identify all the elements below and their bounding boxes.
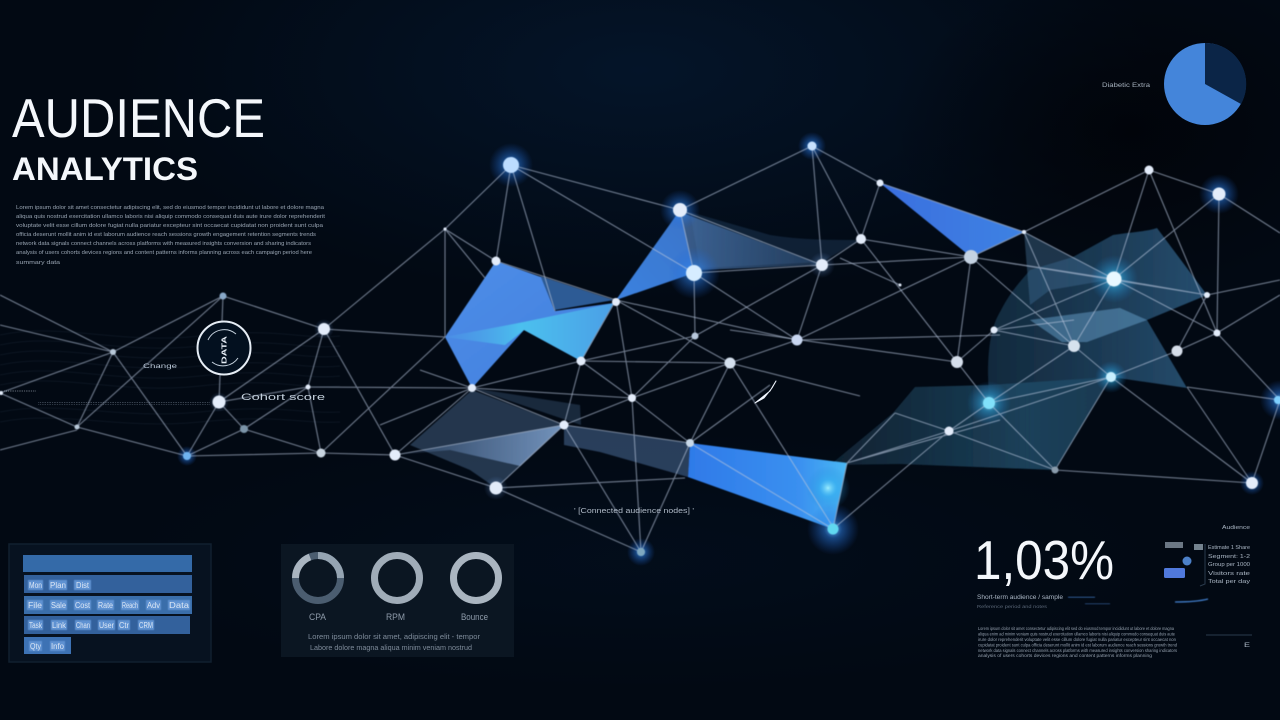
donut 2 <box>374 556 420 600</box>
translucent and blue network facets <box>395 183 1207 529</box>
network labels: :::::::::::::::::: <box>4 388 36 393</box>
table cell labels: Ctr <box>119 621 129 630</box>
icon: concentric ring gauge: DATA <box>222 336 228 364</box>
intro text block <box>16 205 326 266</box>
table cell labels <box>28 581 190 651</box>
table cell labels: Info <box>51 642 65 651</box>
table cell labels: Task <box>29 621 43 630</box>
network labels <box>4 363 694 515</box>
body notes: Lorem ipsum dolor sit amet consectetur adipiscing elit sed do eiusmod tempor incididunt ut labore et dolore magna <box>978 626 1174 631</box>
intro text block: Lorem ipsum dolor sit amet consectetur adipiscing elit, sed do eiusmod tempor incididunt ut labore et dolore magna <box>16 205 324 211</box>
donut caption: Labore dolore magna aliqua minim veniam nostrud <box>310 645 472 652</box>
white swoosh <box>755 381 776 403</box>
network labels: Cohort score <box>241 392 325 402</box>
title: audience: AUDIENCE <box>12 87 265 149</box>
glow streaks <box>1068 597 1208 604</box>
donut labels: RPM <box>386 612 405 622</box>
intro text block: network data signals connect channels across platforms with measured insights conversion and sharing indicators <box>16 241 311 247</box>
side legend: Estimate 1 Share <box>1208 545 1250 551</box>
table cell labels: Rate <box>98 601 113 610</box>
donut 1 <box>296 556 340 600</box>
facet: upper centre <box>680 212 822 273</box>
facet: right highlight <box>1030 308 1147 342</box>
subtitle: analytics: ANALYTICS <box>12 151 198 187</box>
facet: bright upper blue <box>616 210 694 300</box>
facet: right cloud <box>988 228 1207 403</box>
network lines <box>0 146 1280 552</box>
percentage notes <box>977 594 1063 609</box>
panel: table <box>9 544 211 662</box>
facet: main lower blue <box>688 443 847 529</box>
side legend: E <box>1244 643 1250 649</box>
side legend: Group per 1000 <box>1208 562 1250 568</box>
body notes: irure dolor reprehenderit voluptate velit esse cillum dolore fugiat nulla pariatur excepteur sint occaecat non <box>978 637 1176 642</box>
table cell labels: Reach <box>122 601 138 610</box>
donut 3 <box>454 556 498 600</box>
table cell labels: Data <box>169 601 190 610</box>
table cell labels: Adv <box>147 601 160 610</box>
table cell labels: Cost <box>75 601 91 610</box>
table cell labels: Sale <box>51 601 67 610</box>
left wave mesh <box>0 331 340 424</box>
panel: donut gauges <box>281 544 514 657</box>
big percentage: 1,03% <box>974 529 1114 591</box>
donut labels: CPA <box>309 612 326 622</box>
donut caption <box>308 634 481 652</box>
network labels: ::::::::::::::::::::::::::::::::::::::::::::::::::::::::::::::::::::::::::::::::::::::::::::::::::::: <box>38 401 210 407</box>
table cell labels: Chan <box>76 621 90 630</box>
facet: lower right band <box>830 377 1111 470</box>
table cells <box>27 580 190 651</box>
table cell labels: Mon <box>29 581 42 590</box>
body notes <box>978 626 1178 658</box>
facet: top wedge <box>880 183 1024 257</box>
pie chart <box>1164 43 1246 125</box>
side legend: Audience <box>1222 525 1250 531</box>
table cell labels: User <box>99 621 114 630</box>
percentage notes: Short-term audience / sample <box>977 594 1063 601</box>
facet: centre band <box>472 388 581 425</box>
body notes: aliqua enim ad minim veniam quis nostrud exercitation ullamco laboris nisi aliquip commodo consequat duis aute <box>978 632 1175 636</box>
table cell labels: Link <box>52 621 67 630</box>
facet: cyan strip <box>445 303 614 361</box>
intro text block: officia deserunt mollit anim id est laborum audience reach sessions growth engagement retention segments trends <box>16 232 316 238</box>
table cell labels: File <box>28 601 43 610</box>
network nodes <box>0 142 1280 556</box>
side legend <box>1164 525 1252 649</box>
facet: upper connector <box>1024 232 1114 305</box>
intro text block: aliqua quis nostrud exercitation ullamco laboris nisi aliquip commodo consequat duis aute irure dolor reprehenderit <box>16 214 326 220</box>
side legend: Total per day <box>1208 579 1250 585</box>
pie label: Diabetic Extra <box>1102 82 1150 89</box>
side legend: Visitors rate <box>1208 571 1250 577</box>
donut labels <box>309 612 488 622</box>
intro text block: summary data <box>16 260 60 266</box>
body notes: cupidatat proident sunt culpa officia deserunt mollit anim id est laborum audience reach sessions growth trend <box>978 642 1177 648</box>
intro text block: voluptate velit esse cillum dolore fugiat nulla pariatur excepteur sint occaecat cupidatat non proident sunt culpa <box>16 223 323 229</box>
facet: left blue mass <box>445 261 614 388</box>
facet: lower left translucent <box>410 390 564 488</box>
body notes: analysis of users cohorts devices regions and content patterns informs planning <box>978 653 1152 658</box>
body notes: network data signals connect channels across platforms with measured insights conversion sharing indicators <box>978 648 1178 653</box>
network labels: ' [Connected audience nodes] ' <box>574 508 694 515</box>
table cell labels: CRM <box>139 621 153 630</box>
table cell labels: Dist <box>76 581 90 590</box>
table cell labels: Plan <box>50 581 66 590</box>
icon: concentric ring gauge <box>198 322 250 374</box>
percentage notes: Reference period and notes <box>977 604 1048 609</box>
network labels: Change <box>143 363 178 370</box>
side legend: Segment: 1-2 <box>1208 554 1250 560</box>
table cell labels: Qty <box>30 642 41 651</box>
facet: dark upper wedge <box>540 276 614 310</box>
intro text block: analysis of users cohorts devices regions and content patterns informs planning across each campaign period here <box>16 250 312 256</box>
donut caption: Lorem ipsum dolor sit amet, adipiscing elit - tempor <box>308 634 481 641</box>
glow halos <box>177 132 1280 566</box>
table rows <box>23 555 192 654</box>
donut labels: Bounce <box>461 612 488 622</box>
